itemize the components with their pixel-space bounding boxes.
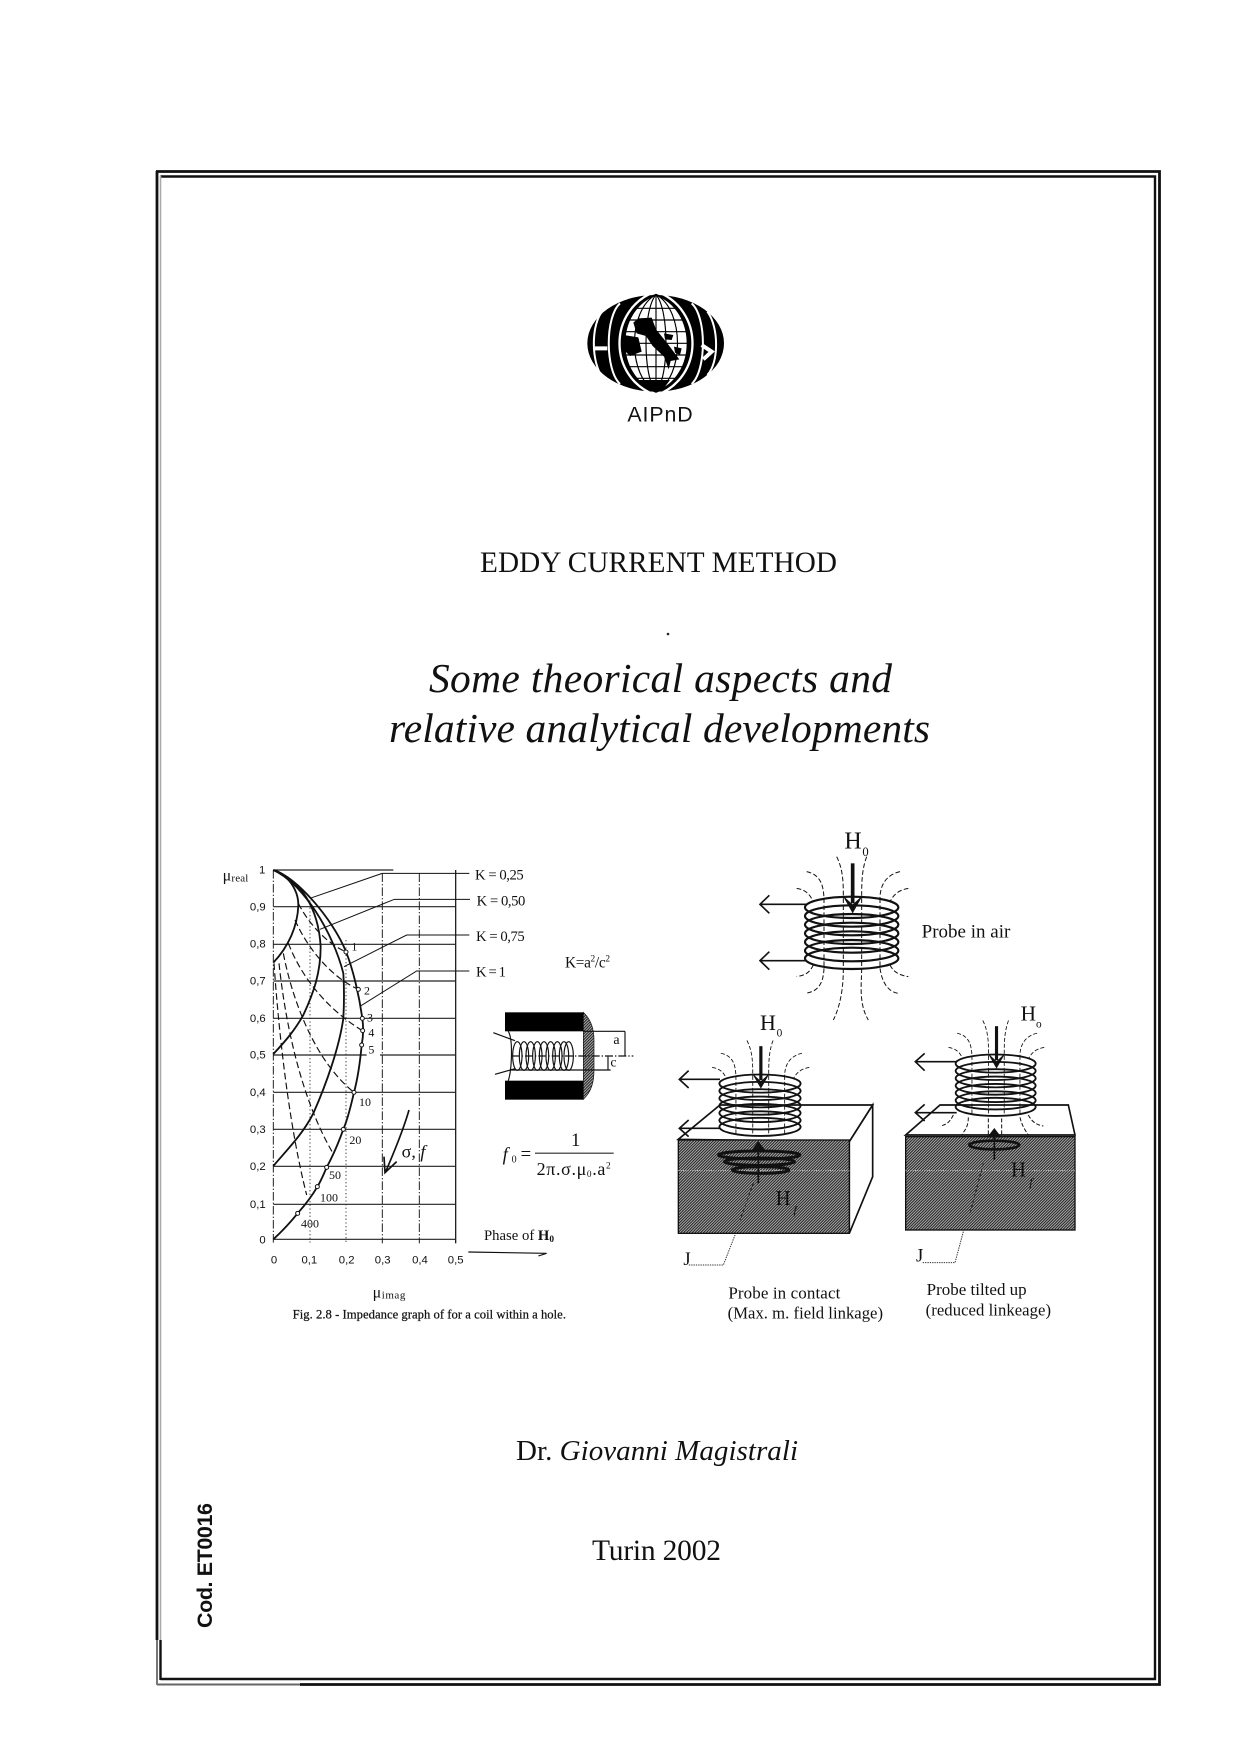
frequency labels (301, 939, 374, 1230)
y axis labels: 0,4 (250, 1087, 266, 1099)
phase of H0 arrow: Phase of H (484, 1228, 549, 1244)
probe tilted up: f (1029, 1175, 1034, 1189)
frequency labels: 3 (367, 1011, 373, 1025)
y axis labels: 0,8 (250, 939, 266, 951)
x axis labels: 0,2 (339, 1254, 355, 1266)
probe in air: Probe in air (922, 922, 1011, 943)
K formula: 2 (605, 954, 610, 964)
title: Some theorical aspects and (429, 655, 892, 701)
title (389, 655, 930, 751)
resonance formula: 1 (571, 1130, 580, 1151)
y axis title: μ (223, 868, 231, 885)
y axis labels: 0,1 (250, 1199, 266, 1211)
heading: method: EDDY CURRENT METHOD (480, 547, 837, 579)
frequency dashed curves (274, 903, 362, 1195)
resonance formula: = (521, 1144, 531, 1165)
x axis labels (271, 1254, 464, 1266)
y axis labels: 0,3 (250, 1124, 266, 1136)
resonance formula: 0 (587, 1170, 592, 1180)
document code: Cod. ET0016 (193, 1503, 217, 1628)
y axis labels (250, 865, 266, 1246)
frequency labels: 400 (301, 1216, 319, 1230)
probe in contact: H (760, 1010, 776, 1035)
chart: impedance graph (223, 865, 633, 1322)
probe tilted up: Probe tilted up (927, 1280, 1027, 1299)
x axis title: imag (382, 1290, 406, 1302)
panel: probe diagrams (678, 828, 1075, 1323)
logo label: AIPnD (627, 403, 693, 427)
y axis labels: 0,7 (250, 976, 266, 988)
probe tilted up: H (1011, 1160, 1026, 1182)
probe tilted up: (reduced linkeage) (926, 1300, 1051, 1319)
y axis title: real (231, 872, 248, 884)
x axis labels: 0,5 (448, 1254, 464, 1266)
diagram: coil within hole (493, 1012, 633, 1100)
probe in air (760, 828, 1011, 1020)
probe in contact: 0 (777, 1028, 783, 1040)
frequency labels: 100 (320, 1191, 338, 1205)
curve markers (296, 950, 365, 1215)
probe in contact (678, 1010, 883, 1323)
diagram: coil within hole: a (613, 1033, 620, 1048)
resonance formula: 2 (606, 1161, 611, 1171)
phase of H0 arrow (468, 1228, 554, 1256)
K labels: K = 1 (476, 965, 506, 981)
place and date: Turin 2002 (592, 1535, 721, 1567)
K labels (475, 867, 525, 981)
x axis labels: 0 (271, 1254, 277, 1266)
frequency labels: 4 (368, 1026, 374, 1040)
K formula: K=a (565, 954, 591, 971)
y axis labels: 1 (259, 865, 265, 877)
resonance formula: 2π.σ.μ (537, 1159, 586, 1179)
author: Dr. Giovanni Magistrali (516, 1435, 798, 1467)
frequency labels: 2 (364, 983, 370, 997)
resonance formula (503, 1130, 614, 1180)
resonance formula: .a (592, 1159, 605, 1179)
phase of H0 arrow: 0 (549, 1235, 554, 1245)
probe in contact: f (793, 1203, 798, 1217)
frequency labels: 10 (359, 1095, 371, 1109)
x axis labels: 0,1 (301, 1254, 317, 1266)
K formula: /c (595, 954, 606, 971)
x axis labels: 0,3 (375, 1254, 391, 1266)
title: relative analytical developments (389, 705, 930, 751)
probe in air: 0 (862, 845, 869, 859)
probe tilted up: H (1021, 1002, 1036, 1026)
probe tilted up: J (916, 1246, 923, 1267)
frequency labels: 1 (351, 939, 357, 953)
y axis labels: 0,5 (250, 1050, 266, 1062)
probe in air: H (844, 828, 862, 854)
diagram: coil within hole: c (610, 1056, 617, 1071)
K labels: K = 0,75 (476, 929, 525, 945)
y axis labels: 0,2 (250, 1161, 266, 1173)
y axis labels: 0 (259, 1234, 266, 1246)
frequency labels: 50 (329, 1168, 341, 1182)
K labels: K = 0,50 (477, 893, 525, 909)
probe in contact: J (683, 1249, 691, 1270)
probe in contact: H (776, 1188, 791, 1210)
probe in contact: Probe in contact (728, 1283, 841, 1302)
logo: AIPnD globe emblem (587, 291, 724, 427)
x axis labels: 0,4 (412, 1254, 428, 1266)
chart grid (273, 870, 456, 1243)
page frame (156, 171, 1160, 1685)
probe in contact: (Max. m. field linkage) (728, 1304, 883, 1323)
probe tilted up: o (1036, 1018, 1042, 1030)
frequency labels: 5 (368, 1042, 374, 1056)
resonance formula: 0 (512, 1155, 517, 1166)
K leader lines (310, 873, 470, 1006)
impedance curves (273, 870, 363, 1239)
y axis labels: 0,9 (250, 901, 266, 913)
resonance formula: f (503, 1145, 511, 1166)
K labels: K = 0,25 (475, 867, 524, 883)
x axis title: μ (373, 1284, 381, 1301)
speck (667, 633, 669, 635)
sigma f arrow (384, 1110, 428, 1173)
figure caption: Fig. 2.8 - Impedance graph of for a coil within a hole. (293, 1308, 566, 1322)
frequency labels: 20 (349, 1133, 361, 1147)
y axis labels: 0,6 (250, 1013, 266, 1025)
K formula: 2 (591, 954, 596, 964)
sigma f arrow: σ, f (402, 1141, 428, 1161)
probe tilted up (906, 1002, 1075, 1319)
